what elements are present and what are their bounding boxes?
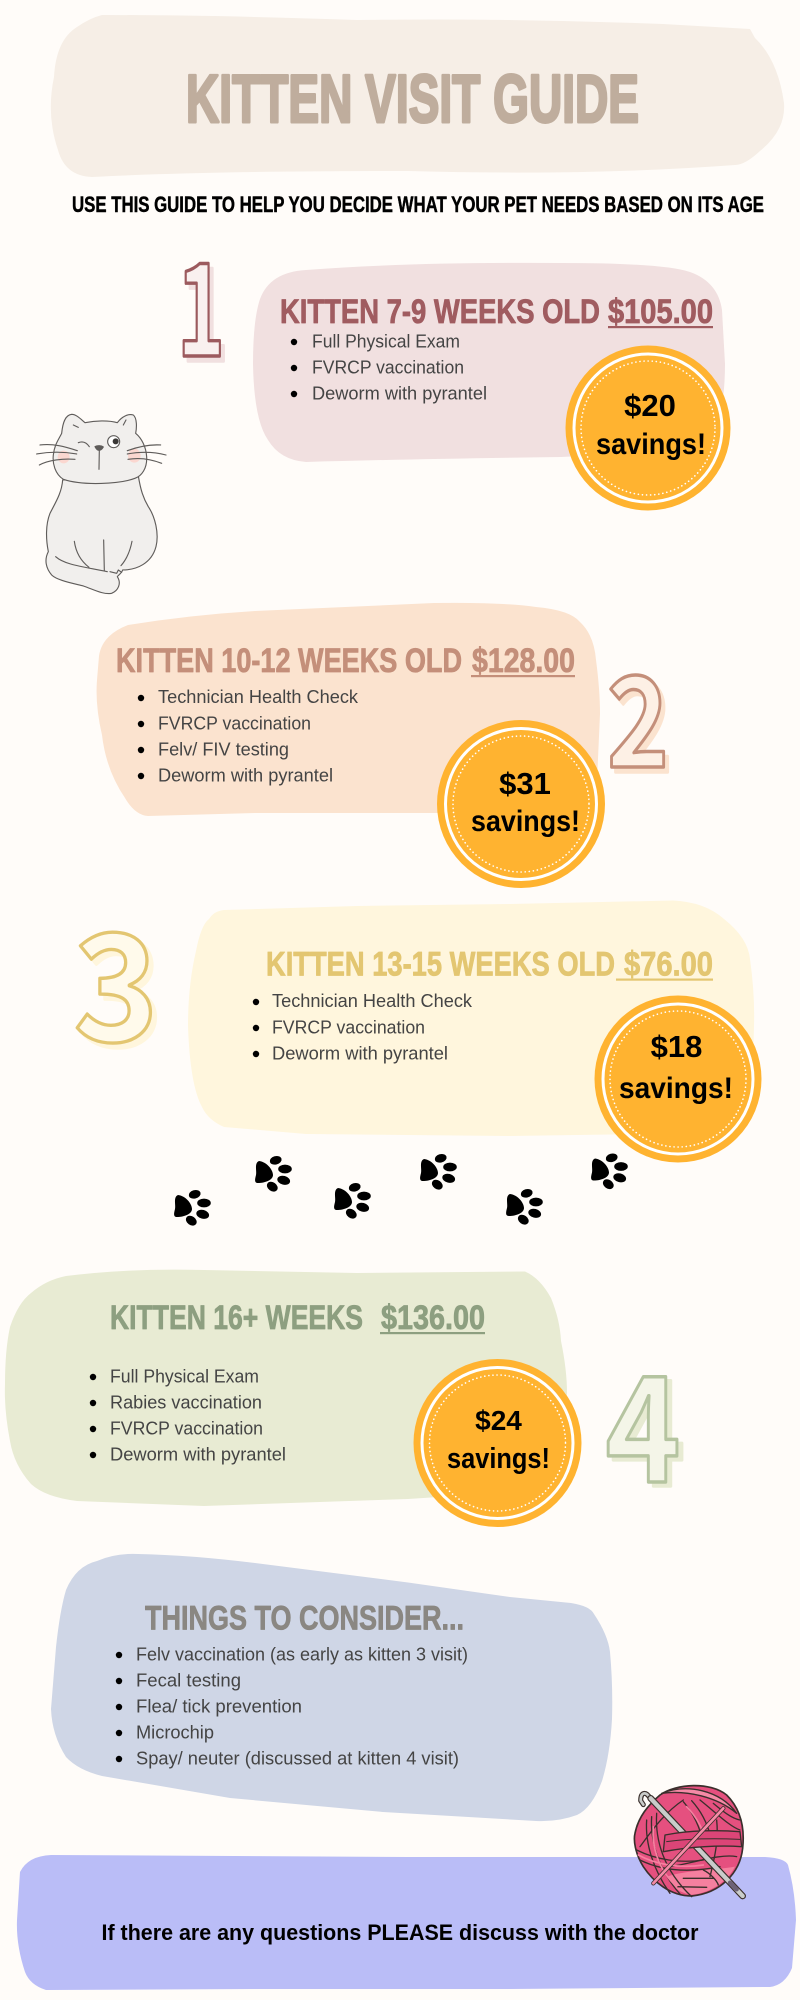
number 4: 4 <box>606 1314 680 1525</box>
list: 7-9 weeks: Full Physical Exam <box>312 332 460 352</box>
list: 16+ weeks: Deworm with pyrantel <box>110 1444 286 1464</box>
list: things to consider <box>116 1644 468 1768</box>
badge: $20 savings: $20 <box>624 388 676 423</box>
heading: 13-15 weeks: $76.00 <box>624 946 713 984</box>
list: 16+ weeks: Rabies vaccination <box>110 1392 262 1412</box>
heading: 13-15 weeks: KITTEN 13-15 WEEKS OLD <box>266 946 615 984</box>
panel: kitten 16+ weeks <box>5 1270 582 1527</box>
list: 13-15 weeks: Technician Health Check <box>272 991 473 1011</box>
badge: $18 savings: savings! <box>619 1072 733 1105</box>
heading: 7-9 weeks: $105.00 <box>608 293 713 331</box>
heading: 10-12 weeks: $128.00 <box>472 642 575 680</box>
panel: things to consider <box>51 1554 612 1821</box>
panel: title banner <box>51 15 784 177</box>
list: 10-12 weeks: FVRCP vaccination <box>158 714 311 734</box>
icon: paw prints <box>174 1152 628 1228</box>
icon: yarn ball with crochet hook <box>634 1786 743 1897</box>
list: things to consider: Microchip <box>136 1722 214 1742</box>
list: 16+ weeks <box>90 1366 286 1464</box>
list: things to consider: Flea/ tick prevention <box>136 1696 302 1716</box>
heading: 16+ weeks: KITTEN 16+ WEEKS <box>110 1299 363 1337</box>
badge: $18 savings: $18 <box>651 1029 702 1064</box>
list: 7-9 weeks: FVRCP vaccination <box>312 358 464 378</box>
panel: kitten 7-9 weeks <box>253 263 730 510</box>
badge: $20 savings <box>566 346 730 510</box>
list: 13-15 weeks <box>253 991 473 1064</box>
heading: 10-12 weeks: KITTEN 10-12 WEEKS OLD <box>116 642 462 680</box>
list: 10-12 weeks: Technician Health Check <box>158 687 359 707</box>
list: 16+ weeks: FVRCP vaccination <box>110 1418 263 1438</box>
list: 13-15 weeks: FVRCP vaccination <box>272 1018 425 1038</box>
panel: kitten 13-15 weeks <box>188 900 762 1162</box>
list: 13-15 weeks: Deworm with pyrantel <box>272 1044 448 1064</box>
list: things to consider: Felv vaccination (as early as kitten 3 visit) <box>136 1644 468 1664</box>
list: 7-9 weeks <box>291 332 487 404</box>
note text: If there are any questions PLEASE discuss with the doctor <box>102 1920 699 1945</box>
badge: $24 savings: $24 <box>475 1405 522 1436</box>
badge: $18 savings <box>594 996 762 1162</box>
list: 16+ weeks: Full Physical Exam <box>110 1366 259 1386</box>
list: 10-12 weeks: Felv/ FIV testing <box>158 740 289 760</box>
badge: $31 savings: savings! <box>471 805 580 838</box>
badge: $31 savings <box>437 720 605 888</box>
badge: $24 savings <box>414 1359 582 1527</box>
heading: 16+ weeks: $136.00 <box>381 1299 485 1337</box>
list: things to consider: Spay/ neuter (discussed at kitten 4 visit) <box>136 1748 459 1768</box>
icon: winking cat <box>37 414 166 594</box>
heading: 7-9 weeks: KITTEN 7-9 WEEKS OLD <box>280 293 600 331</box>
list: 10-12 weeks: Deworm with pyrantel <box>158 766 333 786</box>
number 3: 3 <box>74 869 158 1084</box>
list: 7-9 weeks: Deworm with pyrantel <box>312 384 487 404</box>
list: 10-12 weeks <box>138 687 359 786</box>
list: things to consider: Fecal testing <box>136 1670 241 1690</box>
badge: $31 savings: $31 <box>499 766 551 801</box>
number 1: 1 <box>177 208 225 393</box>
badge: $20 savings: savings! <box>596 428 706 461</box>
badge: $24 savings: savings! <box>447 1443 550 1475</box>
panel: doctor note <box>17 1855 796 1990</box>
number 2: 2 <box>607 622 669 803</box>
panel: kitten 10-12 weeks <box>97 603 605 888</box>
heading: things to consider: THINGS TO CONSIDER... <box>145 1600 464 1638</box>
